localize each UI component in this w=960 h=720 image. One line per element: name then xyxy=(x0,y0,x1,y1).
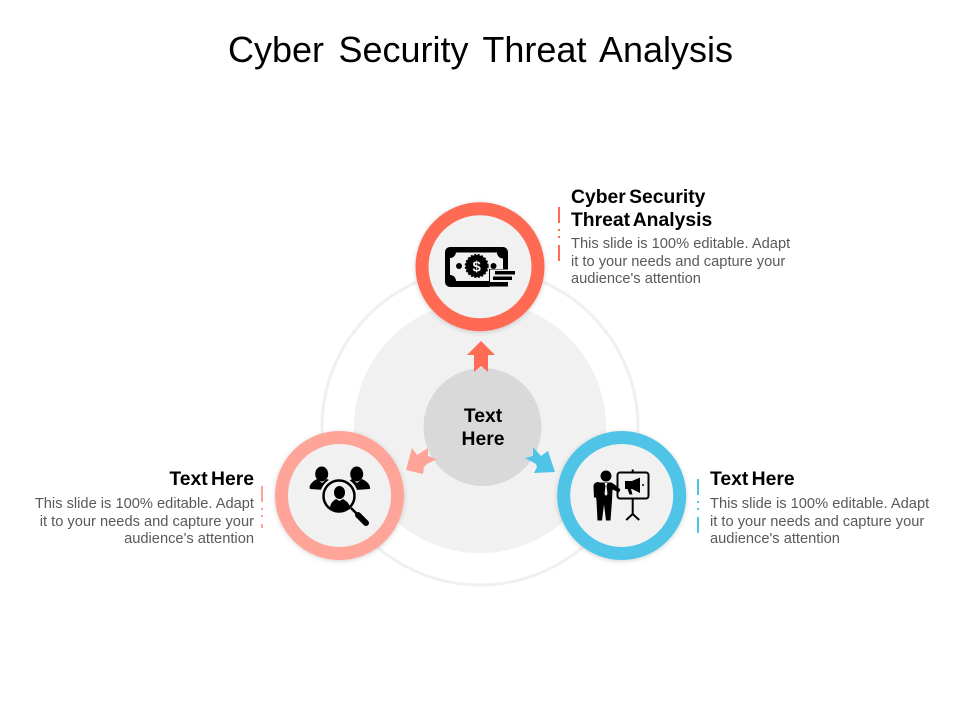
outer ring xyxy=(322,269,638,585)
body: right: it to your needs and capture your xyxy=(710,514,924,530)
body: top: it to your needs and capture your xyxy=(571,254,785,270)
divider: right xyxy=(697,479,699,533)
body: top: audience's attention xyxy=(571,271,701,287)
centre label: Here xyxy=(462,429,504,450)
node: left circle xyxy=(282,438,398,554)
divider: left xyxy=(261,486,263,528)
centre circle xyxy=(424,368,542,486)
body: left: This slide is 100% editable. Adapt xyxy=(35,496,254,512)
body: left: it to your needs and capture your xyxy=(40,514,254,530)
text block: right xyxy=(710,469,930,547)
body: left xyxy=(35,496,254,547)
body: right xyxy=(710,496,930,547)
arrow: lower right xyxy=(525,447,555,473)
icon: banknote: $ xyxy=(473,258,482,276)
middle disc xyxy=(354,301,606,553)
title: Cyber Security Threat Analysis xyxy=(228,29,733,70)
text block: left xyxy=(35,469,254,547)
icon: people search xyxy=(310,466,370,523)
heading: top: Threat Analysis xyxy=(571,210,712,231)
arrow: lower left xyxy=(406,448,437,474)
body: top: This slide is 100% editable. Adapt xyxy=(571,236,790,252)
heading: left: Text Here xyxy=(169,469,254,490)
icon: presenter with board xyxy=(594,470,648,520)
body: right: This slide is 100% editable. Adapt xyxy=(710,496,929,512)
divider: top xyxy=(558,207,560,261)
heading: top xyxy=(571,187,712,231)
centre label: Text xyxy=(464,406,502,427)
heading: right: Text Here xyxy=(710,469,795,490)
node: top circle xyxy=(422,209,538,325)
centre label xyxy=(462,406,504,450)
heading: top: Cyber Security xyxy=(571,187,705,208)
body: right: audience's attention xyxy=(710,531,840,547)
text block: top xyxy=(571,187,790,287)
node: right circle xyxy=(564,438,680,554)
arrow: up xyxy=(467,341,495,372)
body: top xyxy=(571,236,790,287)
body: left: audience's attention xyxy=(124,531,254,547)
